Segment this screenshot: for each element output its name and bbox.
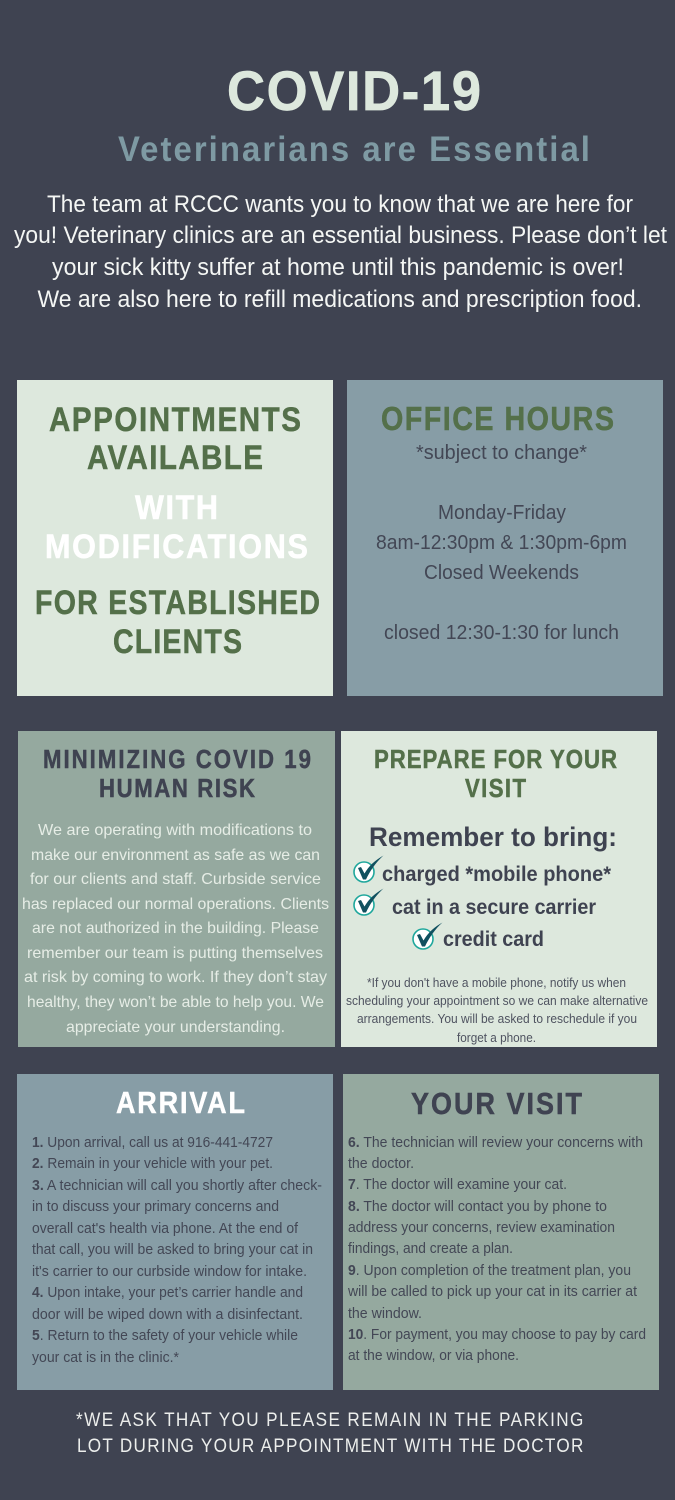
heading: arrival: ARRIVAL: [116, 1086, 245, 1120]
steps 6 to 10: 9. Upon completion of the treatment plan, you: [348, 1263, 631, 1279]
steps 6 to 10: 6. The technician will review your concerns with: [348, 1135, 643, 1151]
steps 6 to 10: address your concerns, review examination: [348, 1220, 615, 1236]
checklist item: mobile phone: charged *mobile phone*: [382, 863, 612, 886]
heading: for established clients: CLIENTS: [113, 623, 242, 661]
steps 1 to 5: door will be wiped down with a disinfectant.: [32, 1307, 303, 1323]
heading: for established clients: FOR ESTABLISHED: [35, 584, 320, 622]
steps 6 to 10: at the window, or via phone.: [348, 1348, 519, 1364]
subheading: remember to bring: Remember to bring:: [369, 822, 617, 852]
steps 6 to 10: the window.: [348, 1306, 422, 1322]
header: title block: [118, 60, 590, 169]
body text: minimizing risk: has replaced our normal operations. Clients: [22, 896, 329, 913]
checklist item: secure carrier: [354, 888, 596, 919]
hours text: Monday-Friday: [438, 502, 566, 524]
body text: minimizing risk: remember our team is putting themselves: [27, 945, 323, 962]
steps 1 to 5: [32, 1135, 322, 1366]
panel: minimizing covid 19 human risk: [18, 731, 335, 1047]
body text: minimizing risk: [22, 822, 329, 1036]
body text: minimizing risk: We are operating with modifications to: [38, 822, 312, 839]
heading: minimizing risk: HUMAN RISK: [99, 775, 256, 803]
footer note: LOT DURING YOUR APPOINTMENT WITH THE DOCTOR: [77, 1434, 583, 1456]
steps 6 to 10: will be called to pick up your cat in its carrier at: [347, 1284, 637, 1300]
steps 6 to 10: 10. For payment, you may choose to pay by card: [348, 1327, 646, 1343]
steps 1 to 5: it's carrier to our curbside window for intake.: [32, 1264, 307, 1280]
intro text block: [14, 191, 667, 313]
hours text: Closed Weekends: [424, 562, 579, 584]
steps 1 to 5: 1. Upon arrival, call us at 916-441-4727: [32, 1135, 273, 1151]
heading: for established clients: [35, 584, 320, 661]
checklist item: credit card: credit card: [443, 928, 544, 951]
heading: appointments available: APPOINTMENTS: [49, 400, 301, 438]
heading: prepare for your visit: [374, 746, 617, 803]
steps 1 to 5: 4. Upon intake, your pet’s carrier handle and: [32, 1285, 303, 1301]
steps 1 to 5: overall cat's health via phone. At the end of: [32, 1221, 299, 1237]
steps 6 to 10: 7. The doctor will examine your cat.: [348, 1177, 567, 1193]
steps 6 to 10: [347, 1135, 646, 1364]
checklist item: credit card: [413, 922, 544, 951]
subtitle: Veterinarians are Essential: [118, 130, 590, 169]
heading: your visit: YOUR VISIT: [411, 1087, 582, 1121]
footnote: mobile phone: [346, 975, 648, 1045]
panel: appointments available: [17, 380, 333, 696]
steps 1 to 5: 5. Return to the safety of your vehicle while: [32, 1328, 298, 1344]
intro text block: We are also here to refill medications and prescription food.: [38, 286, 642, 313]
body text: minimizing risk: appreciate your understanding.: [66, 1019, 285, 1036]
footnote: mobile phone: forget a phone.: [457, 1030, 536, 1045]
heading: office hours: OFFICE HOURS: [381, 400, 614, 437]
heading: prepare for your visit: VISIT: [465, 775, 526, 803]
heading: minimizing risk: MINIMIZING COVID 19: [43, 746, 311, 774]
heading: with modifications: [45, 489, 308, 565]
panel: prepare for your visit: [341, 731, 657, 1047]
steps 6 to 10: the doctor.: [348, 1156, 414, 1172]
steps 1 to 5: that call, you will be asked to bring your cat in: [32, 1242, 313, 1258]
intro text block: The team at RCCC wants you to know that we are here for: [47, 191, 633, 218]
footnote: mobile phone: scheduling your appointment so we can make alternative: [346, 993, 648, 1008]
checklist item: mobile phone: [354, 856, 612, 886]
steps 6 to 10: findings, and create a plan.: [348, 1241, 513, 1257]
steps 1 to 5: 3. A technician will call you shortly after check-: [32, 1178, 322, 1194]
hours text: closed 12:30-1:30 for lunch: [384, 622, 619, 644]
body text: minimizing risk: at risk by coming to work. If they don’t stay: [24, 969, 327, 986]
heading: prepare for your visit: PREPARE FOR YOUR: [374, 746, 617, 774]
hours text: *subject to change*: [416, 442, 587, 464]
panel: arrival: [17, 1074, 333, 1390]
steps 1 to 5: in to discuss your primary concerns and: [32, 1199, 279, 1215]
footer note: [76, 1408, 583, 1456]
checklist item: secure carrier: cat in a secure carrier: [392, 896, 596, 919]
heading: minimizing risk: [43, 746, 311, 803]
heading: with modifications: WITH: [135, 489, 218, 526]
panel: office hours: [347, 380, 663, 696]
footnote: mobile phone: arrangements. You will be asked to reschedule if you: [357, 1011, 637, 1026]
heading: appointments available: AVAILABLE: [87, 438, 263, 476]
footnote: mobile phone: *If you don't have a mobile phone, notify us when: [367, 975, 626, 990]
hours text: [376, 442, 627, 644]
heading: with modifications: MODIFICATIONS: [45, 528, 308, 565]
footer note: *WE ASK THAT YOU PLEASE REMAIN IN THE PARKING: [76, 1408, 583, 1430]
intro text block: your sick kitty suffer at home until this pandemic is over!: [52, 254, 624, 281]
body text: minimizing risk: are not authorized in the building. Please: [32, 920, 319, 937]
body text: minimizing risk: for our clients and staff. Curbside service: [30, 871, 321, 888]
title: COVID-19: [227, 60, 481, 122]
panel: your visit: [343, 1074, 659, 1390]
body text: minimizing risk: healthy, they won’t be able to help you. We: [27, 994, 324, 1011]
hours text: 8am-12:30pm & 1:30pm-6pm: [376, 532, 627, 554]
steps 6 to 10: 8. The doctor will contact you by phone to: [348, 1199, 607, 1215]
body text: minimizing risk: make our environment as safe as we can: [31, 847, 320, 864]
steps 1 to 5: 2. Remain in your vehicle with your pet.: [32, 1156, 273, 1172]
steps 1 to 5: your cat is in the clinic.*: [32, 1350, 179, 1366]
heading: appointments available: [49, 400, 301, 476]
